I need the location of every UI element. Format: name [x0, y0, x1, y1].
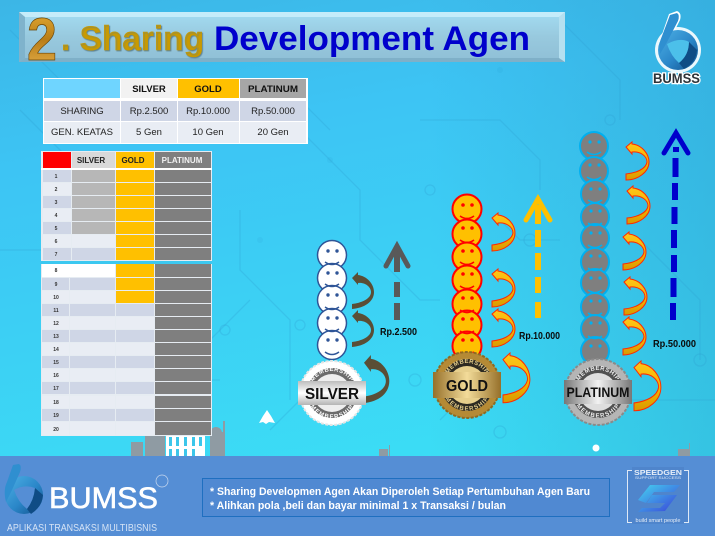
- row numbers: 11: [53, 308, 59, 314]
- generation row: [51, 127, 289, 138]
- logo: Speedgen: [628, 467, 688, 524]
- gold membership badge: [433, 351, 501, 419]
- platinum amount: Rp.50.000: [653, 339, 696, 350]
- row numbers: 13: [53, 334, 59, 340]
- row numbers: [53, 174, 59, 433]
- platinum tier: [564, 128, 696, 426]
- silver membership badge: MEMBERSHIP: [310, 368, 353, 381]
- gold tier: [433, 194, 560, 419]
- table header labels: GOLD: [194, 84, 222, 95]
- silver smiley stack: [318, 240, 346, 360]
- generation row: GEN. KEATAS: [51, 127, 113, 138]
- platinum smiley stack: [580, 132, 609, 365]
- row numbers: 10: [53, 295, 59, 301]
- table: package comparison: [43, 78, 308, 144]
- row numbers: 12: [53, 321, 59, 327]
- gold column: [116, 170, 154, 435]
- generation row: 20 Gen: [257, 127, 289, 138]
- gold smiley stack: [452, 194, 482, 360]
- logo: BUMSS top right: [653, 11, 701, 86]
- silver membership badge: MEMBERSHIP: [311, 405, 352, 418]
- silver membership badge: [298, 360, 366, 426]
- header row: PLATINUM: [162, 156, 203, 165]
- title banner: [19, 6, 565, 73]
- title gold text: . Sharing: [61, 20, 204, 58]
- note line 1: * Sharing Developmen Agen Akan Diperoleh Setiap Pertumbuhan Agen Baru: [210, 486, 590, 498]
- logo: BUMSS footer: [5, 464, 168, 534]
- row numbers: 6: [55, 239, 58, 245]
- title blue text: Development Agen: [214, 20, 530, 58]
- tagline: APLIKASI TRANSAKSI MULTIBISNIS: [7, 522, 157, 534]
- row numbers: 5: [55, 226, 58, 232]
- row numbers: 19: [53, 413, 59, 419]
- title number 2: 2: [27, 6, 57, 73]
- logo wordmark: BUMSS: [653, 71, 700, 86]
- speedgen tagline: build smart people: [636, 518, 680, 524]
- row numbers: 15: [53, 360, 59, 366]
- row numbers: 8: [55, 268, 58, 274]
- sharing row: Rp.2.500: [130, 106, 168, 117]
- row numbers: 20: [53, 427, 59, 433]
- table header labels: [132, 84, 298, 95]
- footer band: [0, 456, 715, 536]
- platinum membership badge: [564, 358, 632, 426]
- gold curved arrows: [492, 213, 530, 403]
- speedgen sub name: SUPPORT SUCCESS: [635, 476, 682, 480]
- footer wordmark: BUMSS: [49, 482, 158, 515]
- platinum membership badge: MEMBERSHIP: [576, 366, 620, 380]
- header row: GOLD: [121, 156, 145, 165]
- sharing row: Rp.50.000: [251, 106, 295, 117]
- first column: [42, 170, 115, 435]
- table: generation levels: [41, 151, 212, 436]
- platinum column: [155, 170, 211, 435]
- table header labels: SILVER: [132, 84, 166, 95]
- platinum curved arrows: [623, 142, 661, 411]
- speedgen name: SPEEDGEN: [634, 468, 682, 477]
- gold dashed up arrow: [526, 199, 550, 318]
- row numbers: 4: [55, 213, 58, 219]
- platinum dashed up arrow: [664, 133, 688, 320]
- silver curved arrows: [352, 272, 389, 403]
- silver dashed up arrow: [386, 246, 408, 320]
- silver tier: [298, 240, 417, 426]
- row numbers: 3: [55, 200, 58, 206]
- gold badge label: GOLD: [446, 378, 488, 395]
- row numbers: 9: [55, 282, 58, 288]
- row numbers: 17: [53, 386, 59, 392]
- sharing row: SHARING: [60, 106, 104, 117]
- row numbers: 18: [53, 400, 59, 406]
- sharing row: [60, 106, 295, 117]
- gold amount: Rp.10.000: [519, 331, 560, 342]
- row numbers: 16: [53, 373, 59, 379]
- header row: [43, 152, 211, 168]
- platinum badge label: PLATINUM: [566, 384, 630, 400]
- silver column: [70, 170, 115, 435]
- generation row: 10 Gen: [192, 127, 224, 138]
- sharing row: Rp.10.000: [186, 106, 230, 117]
- header row: SILVER: [77, 156, 105, 165]
- gold membership badge: MEMBERSHIP: [446, 398, 487, 410]
- note box: [202, 478, 610, 516]
- generation row: 5 Gen: [136, 127, 162, 138]
- silver amount: Rp.2.500: [380, 327, 417, 338]
- silver badge label: SILVER: [305, 386, 359, 403]
- platinum membership badge: MEMBERSHIP: [576, 404, 618, 418]
- row numbers: 7: [55, 252, 58, 258]
- row numbers: 1: [55, 174, 58, 180]
- note line 2: * Alihkan pola ,beli dan bayar minimal 1 x Transaksi / bulan: [210, 500, 506, 512]
- gold membership badge: MEMBERSHIP: [444, 358, 488, 372]
- table header labels: PLATINUM: [248, 84, 298, 95]
- row numbers: 2: [55, 187, 58, 193]
- row numbers: 14: [53, 347, 59, 353]
